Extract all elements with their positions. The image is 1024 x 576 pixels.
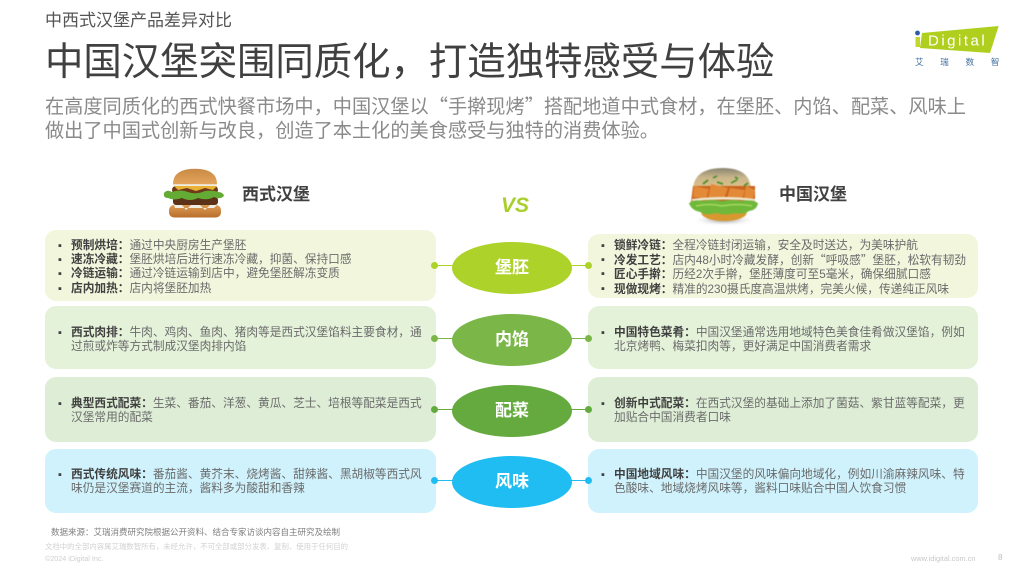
connector dot: sides right <box>585 406 592 413</box>
western flavor text <box>58 468 422 495</box>
panel: chinese bun: ▪ <box>601 268 605 280</box>
chinese sides text: 加贴合中国消费者口味 <box>614 411 731 424</box>
western sides text: 汉堡常用的配菜 <box>71 411 153 424</box>
category oval: bun: 堡胚 <box>495 258 529 277</box>
intro paragraph: 在高度同质化的西式快餐市场中，中国汉堡以“手擀现烤”搭配地道中式食材，在堡胚、内馅、配菜、风味上 <box>45 91 966 119</box>
panel: western flavor <box>45 449 436 513</box>
section label: 中西式汉堡产品差异对比 <box>45 11 232 30</box>
chinese sides text <box>601 396 965 424</box>
data source: 数据来源：艾瑞消费研究院根据公开资料、结合专家访谈内容自主研究及绘制 <box>51 527 340 537</box>
connector dot: bun right <box>585 262 592 269</box>
category oval: sides: 配菜 <box>495 401 529 420</box>
copyright line: ©2024 iDigital Inc. <box>45 554 103 563</box>
panel: chinese flavor <box>588 449 978 513</box>
western bun text: 店内加热：店内将堡胚加热 <box>71 282 211 295</box>
website: www.idigital.com.cn <box>911 554 975 563</box>
western bun text: 预制烘培：通过中央厨房生产堡胚 <box>71 239 246 252</box>
connector: filling right <box>570 338 588 339</box>
chinese bun text: 锁鲜冷链：全程冷链封闭运输，安全及时送达，为美味护航 <box>614 239 918 252</box>
panel: chinese filling <box>588 306 978 369</box>
category oval: filling: 内馅 <box>495 330 529 349</box>
panel: chinese sides: ▪ <box>601 398 605 410</box>
title: 中国汉堡突围同质化，打造独特感受与体验 <box>45 41 774 84</box>
category oval: flavor: 风味 <box>495 472 529 491</box>
heading: chinese burger: 中国汉堡 <box>779 185 847 204</box>
icon: chinese burger <box>688 167 759 224</box>
connector: bun right <box>570 265 588 266</box>
page number: 8 <box>998 553 1002 562</box>
logo: iDigital <box>915 26 1016 67</box>
icon: western burger <box>164 168 224 218</box>
panel: western sides: ▪ <box>58 398 62 410</box>
panel: western bun: ▪ <box>58 268 62 280</box>
chinese filling text <box>601 326 965 353</box>
western filling text: 西式肉排：牛肉、鸡肉、鱼肉、猪肉等是西式汉堡馅料主要食材，通 <box>71 326 422 339</box>
chinese flavor text: 中国地域风味：中国汉堡的风味偏向地域化，例如川渝麻辣风味、特 <box>614 468 965 481</box>
panel: chinese bun <box>588 234 978 298</box>
panel: western bun: ▪ <box>58 240 62 252</box>
panel: western bun <box>45 230 436 301</box>
copyright notice: 文档中的全部内容属艾瑞数智所有，未经允许，不可全部或部分发表、复制、使用于任何目的 <box>45 542 348 551</box>
connector dot: flavor right <box>585 477 592 484</box>
category oval: filling <box>452 314 572 366</box>
connector: flavor right <box>570 480 588 481</box>
connector dot: flavor left <box>431 477 438 484</box>
category oval: bun <box>452 242 572 294</box>
connector: bun left <box>434 265 454 266</box>
category oval: sides <box>452 385 572 437</box>
western bun text: 速冻冷藏：堡胚烘培后进行速冻冷藏，抑菌、保持口感 <box>71 253 352 266</box>
connector: sides left <box>434 409 454 410</box>
connector dot: filling right <box>585 335 592 342</box>
panel: chinese flavor: ▪ <box>601 469 605 481</box>
connector: sides right <box>570 409 588 410</box>
heading: western burger: 西式汉堡 <box>242 185 310 204</box>
category oval: flavor <box>452 456 572 508</box>
panel: western filling <box>45 306 436 369</box>
chinese bun text: 冷发工艺：店内48小时冷藏发酵，创新“呼吸感”堡胚，松软有韧劲 <box>614 251 966 268</box>
connector dot: filling left <box>431 335 438 342</box>
panel: western flavor: ▪ <box>58 469 62 481</box>
chinese bun text: 匠心手擀：历经2次手擀，堡胚薄度可至5毫米，确保细腻口感 <box>614 268 931 281</box>
panel: western filling: ▪ <box>58 327 62 339</box>
chinese bun text <box>601 238 966 296</box>
connector dot: bun left <box>431 262 438 269</box>
western flavor text: 西式传统风味：番茄酱、黄芥末、烧烤酱、甜辣酱、黑胡椒等西式风 <box>71 468 422 481</box>
western filling text: 过煎或炸等方式制成汉堡肉排内馅 <box>71 340 246 353</box>
connector: flavor left <box>434 480 454 481</box>
panel: chinese bun: ▪ <box>601 254 605 266</box>
panel: western bun: ▪ <box>58 254 62 266</box>
western flavor text: 味仍是汉堡赛道的主流，酱料多为酸甜和香辣 <box>71 482 305 495</box>
connector dot: sides left <box>431 406 438 413</box>
western filling text <box>58 326 422 353</box>
intro paragraph <box>45 91 966 142</box>
VS mark: VS <box>501 194 529 217</box>
western bun text: 冷链运输：通过冷链运输到店中，避免堡胚解冻变质 <box>71 267 340 280</box>
logo: iDigital: Digital <box>928 32 987 50</box>
panel: western bun: ▪ <box>58 283 62 295</box>
western sides text: 典型西式配菜：生菜、番茄、洋葱、黄瓜、芝士、培根等配菜是西式 <box>71 397 422 410</box>
chinese filling text: 北京烤鸭、梅菜扣肉等，更好满足中国消费者需求 <box>614 340 871 353</box>
chinese flavor text: 色酸味、地域烧烤风味等，酱料口味贴合中国人饮食习惯 <box>614 482 906 495</box>
panel: chinese sides <box>588 377 978 442</box>
panel: chinese bun: ▪ <box>601 240 605 252</box>
chinese sides text: 创新中式配菜：在西式汉堡的基础上添加了菌菇、紫甘蓝等配菜，更 <box>614 397 965 410</box>
western sides text <box>58 396 422 424</box>
panel: western sides <box>45 377 436 442</box>
chinese bun text: 现做现烤：精准的230摄氏度高温烘烤，完美火候，传递纯正风味 <box>614 283 949 296</box>
chinese flavor text <box>601 468 965 495</box>
intro paragraph: 做出了中国式创新与改良，创造了本土化的美食感受与独特的消费体验。 <box>45 120 659 142</box>
western bun text <box>58 238 352 295</box>
logo: iDigital: 艾瑞数智 <box>915 57 1016 67</box>
panel: chinese bun: ▪ <box>601 283 605 295</box>
connector: filling left <box>434 338 454 339</box>
chinese filling text: 中国特色菜肴：中国汉堡通常选用地域特色美食佳肴做汉堡馅，例如 <box>614 326 965 339</box>
panel: chinese filling: ▪ <box>601 327 605 339</box>
